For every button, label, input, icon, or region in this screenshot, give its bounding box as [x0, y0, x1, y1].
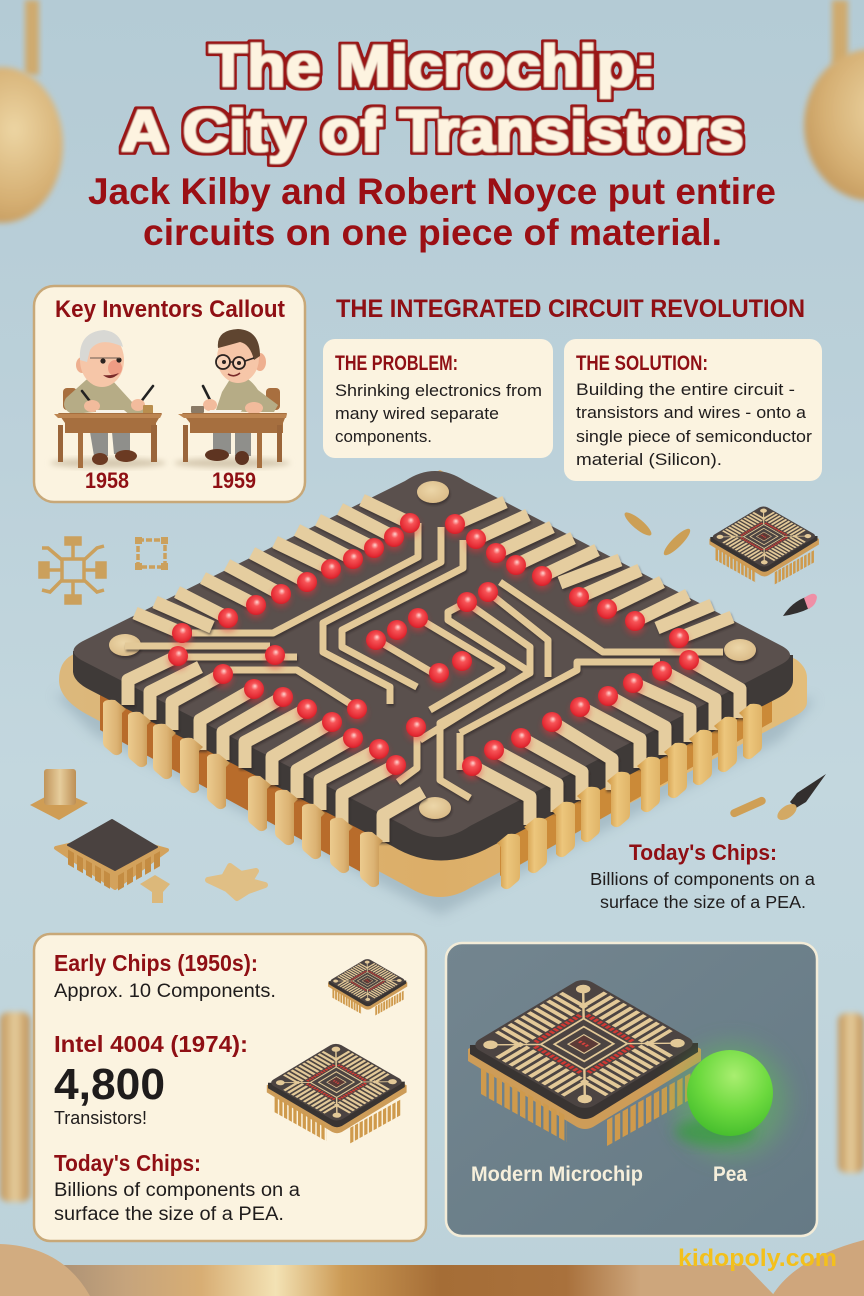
panel: the problem: many wired separate — [335, 404, 499, 423]
panel: chip versus pea — [446, 943, 817, 1236]
side pins, lower-right — [497, 704, 762, 889]
panel: the solution: THE SOLUTION: — [576, 352, 708, 375]
icon: small packaged chip — [56, 820, 167, 888]
dark top surface — [74, 471, 790, 837]
panel: the solution: transistors and wires - onto a — [576, 403, 807, 422]
panel: transistor count timeline: Transistors! — [54, 1108, 147, 1128]
year labels — [85, 468, 256, 493]
lower-right contact strips and bends — [472, 660, 740, 825]
panel: the problem — [323, 339, 553, 458]
section heading: THE INTEGRATED CIRCUIT REVOLUTION — [336, 295, 805, 323]
upper-right contact strips — [455, 502, 732, 638]
mini chip early — [328, 958, 407, 1011]
panel: transistor count timeline: Billions of components on a — [54, 1180, 300, 1201]
LED glow — [168, 517, 699, 780]
icon: gold capsules — [622, 509, 693, 558]
callout heading: Key Inventors Callout — [55, 296, 285, 323]
icon: gold cube piece — [140, 875, 170, 903]
copper bands — [100, 695, 372, 878]
panel: key inventors callout — [34, 286, 305, 502]
subtitle — [88, 171, 776, 253]
comparison labels — [471, 1163, 747, 1186]
title: A City of Transistors — [121, 99, 744, 164]
icon: gold pin and pen — [729, 774, 826, 823]
modern microchip — [468, 977, 701, 1133]
panel: the problem: Shrinking electronics from — [335, 381, 542, 400]
panel: transistor count timeline: Approx. 10 Components. — [54, 981, 276, 1002]
inventor 1959 illustration — [174, 329, 290, 468]
today's chips text: Today's Chips: — [54, 1150, 201, 1176]
watermark: kidopoly.com — [678, 1245, 837, 1272]
subtitle: Jack Kilby and Robert Noyce put entire — [88, 171, 776, 212]
year labels: 1958 — [85, 468, 129, 493]
mini chip intel — [267, 1042, 407, 1136]
icon: pink tipped marker — [783, 594, 817, 616]
comparison labels: Modern Microchip — [471, 1163, 643, 1186]
title: The Microchip: — [209, 34, 656, 99]
panel: the solution — [564, 339, 822, 481]
year labels: 1959 — [212, 468, 256, 493]
title — [121, 34, 744, 164]
panel: the solution: Building the entire circuit - — [576, 380, 795, 399]
chip shadow — [55, 640, 815, 915]
corner pads — [109, 481, 756, 819]
panel: the problem: THE PROBLEM: — [335, 352, 458, 375]
intel 4004 text: Intel 4004 (1974): — [54, 1031, 248, 1057]
comparison labels: Pea — [713, 1163, 747, 1186]
today's chips callout: Billions of components on a — [590, 869, 815, 889]
upper-left contact strips — [135, 500, 410, 633]
thin circuit traces — [125, 523, 723, 798]
icon: gold post — [30, 769, 88, 820]
panel: the solution: single piece of semiconductor — [576, 427, 812, 446]
lower-left contact strips and bends — [128, 656, 423, 842]
side pins, lower-left — [103, 700, 383, 887]
gold base — [59, 470, 807, 897]
panel: the problem: components. — [335, 427, 432, 446]
big number: 4,800 — [54, 1060, 165, 1109]
subtitle: circuits on one piece of material. — [143, 212, 722, 253]
pea — [675, 1044, 787, 1156]
today's chips callout: Today's Chips: — [629, 840, 777, 865]
main microchip — [55, 470, 815, 915]
red LED nodes — [168, 513, 699, 776]
panel: the solution: material (Silicon). — [576, 450, 722, 469]
today's chips callout — [590, 840, 815, 912]
early chips text: Early Chips (1950s): — [54, 950, 258, 976]
mini chip top right — [709, 505, 819, 578]
panel: transistor count timeline — [34, 934, 426, 1241]
dark side — [73, 651, 793, 860]
today's chips callout: surface the size of a PEA. — [600, 892, 806, 912]
inventor 1958 illustration — [50, 330, 166, 468]
icon: gold square trace — [135, 537, 168, 570]
icon: gold star piece — [208, 866, 265, 898]
icon: circuit schematic — [40, 538, 105, 603]
panel: transistor count timeline: surface the size of a PEA. — [54, 1204, 284, 1225]
